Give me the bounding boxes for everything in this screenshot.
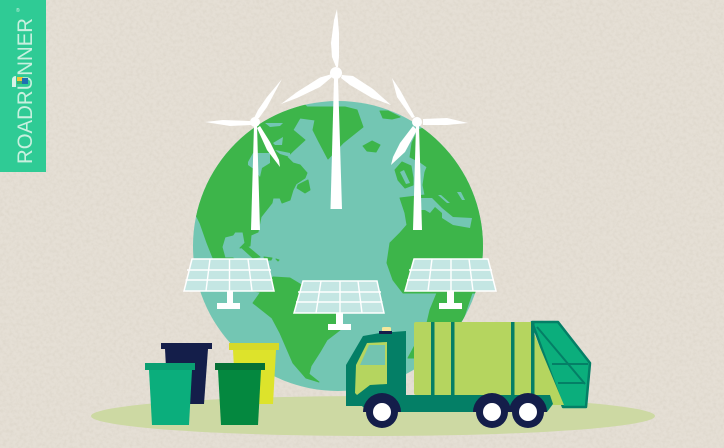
bin: teal — [145, 363, 195, 425]
wind turbine: left — [205, 79, 282, 230]
logo wordmark: ROADRUNNER — [13, 18, 37, 164]
solar panel: right — [405, 259, 496, 309]
logo emblem — [12, 76, 28, 87]
bin: yellow — [229, 343, 279, 404]
cargo box — [414, 322, 534, 396]
chassis — [390, 395, 553, 412]
arctic islands — [363, 111, 400, 152]
south america — [253, 277, 340, 382]
solar panel: left — [184, 259, 274, 309]
front wheel — [363, 393, 401, 428]
inland water — [248, 123, 472, 228]
hopper — [532, 322, 590, 407]
registered mark: ® — [16, 7, 20, 14]
newfoundland — [297, 180, 310, 193]
africa and eurasia — [386, 128, 483, 358]
rear wheels — [473, 393, 547, 428]
logo tab — [0, 0, 46, 172]
bin: green — [215, 363, 265, 425]
globe — [193, 101, 483, 391]
solar panel: centre — [294, 281, 384, 330]
garbage truck — [346, 322, 590, 428]
bin: navy — [161, 343, 212, 404]
wind turbine: right — [391, 78, 468, 230]
continents — [196, 104, 483, 382]
britain and scandinavia — [395, 162, 413, 188]
north america and greenland — [196, 104, 364, 292]
cab — [346, 327, 406, 412]
caribbean islands — [242, 247, 279, 261]
wind turbine: centre — [281, 9, 391, 209]
ground ellipse — [91, 396, 655, 436]
